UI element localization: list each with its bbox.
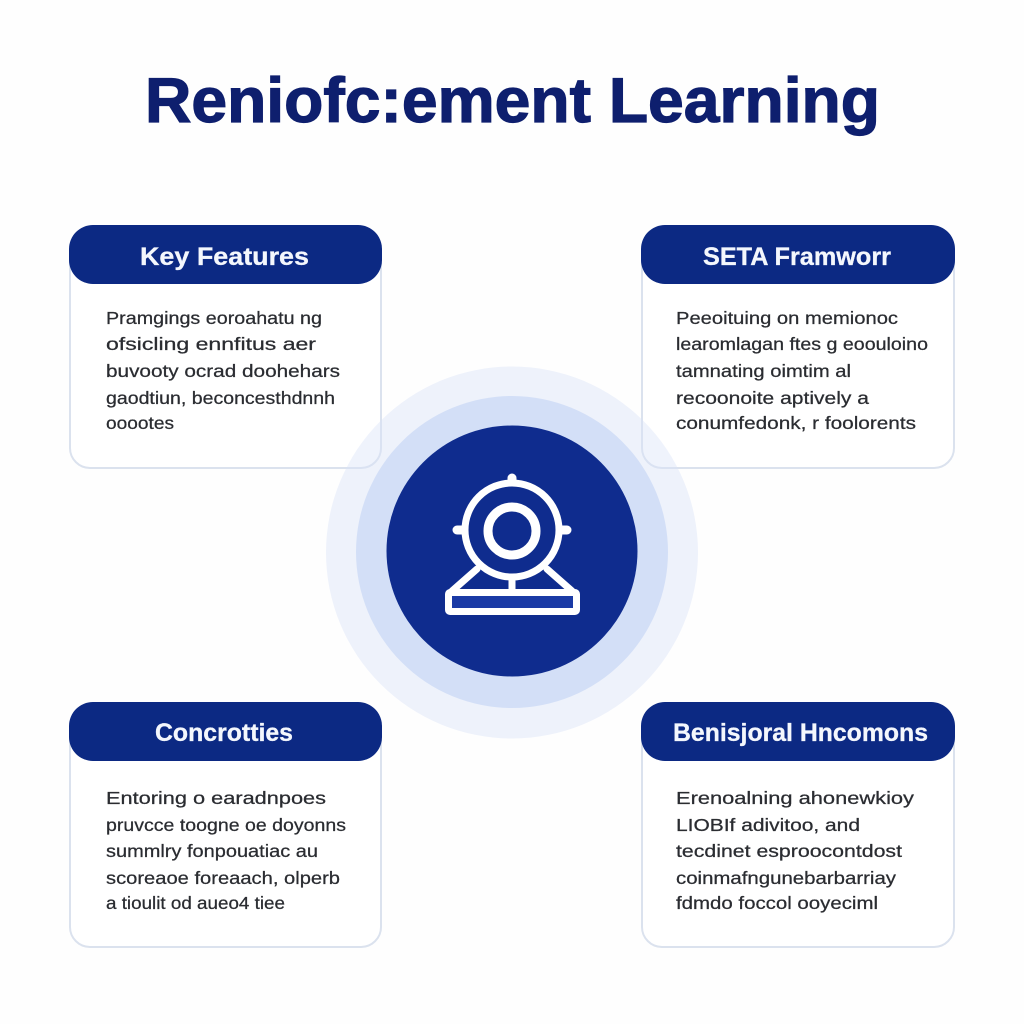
text block: concrotties <box>106 788 346 913</box>
header: benisjoral hncomons: Benisjoral Hncomons <box>673 719 928 747</box>
header: benisjoral hncomons <box>641 702 955 761</box>
text block: benisjoral hncomons: coinmafngunebarbarriay <box>676 868 896 888</box>
text block: key features: ooootes <box>106 413 174 433</box>
central hub <box>326 366 698 738</box>
text block: key features: Pramgings eoroahatu ng <box>106 308 322 328</box>
text block: SETA framework: Peeoituing on memionoc <box>676 308 898 328</box>
panel: SETA framework <box>641 225 955 468</box>
panel: concrotties <box>69 702 382 947</box>
text block: benisjoral hncomons <box>676 788 914 913</box>
header: key features: Key Features <box>140 243 309 271</box>
header: concrotties <box>69 702 382 761</box>
text block: SETA framework: conumfedonk, r foolorents <box>676 413 916 433</box>
text block: benisjoral hncomons: LIOBIf adivitoo, and <box>676 815 860 835</box>
text block: key features: gaodtiun, beconcesthdnnh <box>106 388 335 408</box>
text block: key features <box>106 308 340 433</box>
card body: concrotties <box>70 712 381 947</box>
text block: benisjoral hncomons: fdmdo foccol ooyeciml <box>676 893 878 913</box>
text block: key features: ofsicling ennfitus aer <box>106 334 316 354</box>
header: key features <box>69 225 382 284</box>
text block: concrotties: summlry fonpouatiac au <box>106 841 318 861</box>
text block: benisjoral hncomons: Erenoalning ahonewkioy <box>676 788 914 808</box>
inner disc <box>386 426 638 676</box>
middle ring <box>356 396 668 708</box>
text block: SETA framework: tamnating oimtim al <box>676 361 851 381</box>
panel: benisjoral hncomons <box>641 702 955 947</box>
header: SETA framework <box>641 225 955 284</box>
text block: SETA framework: learomlagan ftes g eoouloino <box>676 334 928 354</box>
text block: SETA framework: recoonoite aptively a <box>676 388 869 408</box>
title: Reniofc:ement Learning <box>145 66 880 136</box>
text block: SETA framework <box>676 308 928 433</box>
panel: key features <box>69 225 382 468</box>
card body: key features <box>70 235 381 468</box>
text block: concrotties: Entoring o earadnpoes <box>106 788 326 808</box>
text block: concrotties: scoreaoe foreaach, olperb <box>106 868 340 888</box>
text block: benisjoral hncomons: tecdinet esproocontdost <box>676 841 902 861</box>
card body: benisjoral hncomons <box>642 712 954 947</box>
text block: key features: buvooty ocrad doohehars <box>106 361 340 381</box>
icon: robot sensor on base <box>448 478 576 612</box>
outer ring <box>326 366 698 738</box>
header: SETA framework: SETA Framworr <box>703 243 891 271</box>
text block: concrotties: a tioulit od aueo4 tiee <box>106 893 285 913</box>
card body: SETA framework <box>642 235 954 468</box>
text block: concrotties: pruvcce toogne oe doyonns <box>106 815 346 835</box>
header: concrotties: Concrotties <box>155 719 293 747</box>
